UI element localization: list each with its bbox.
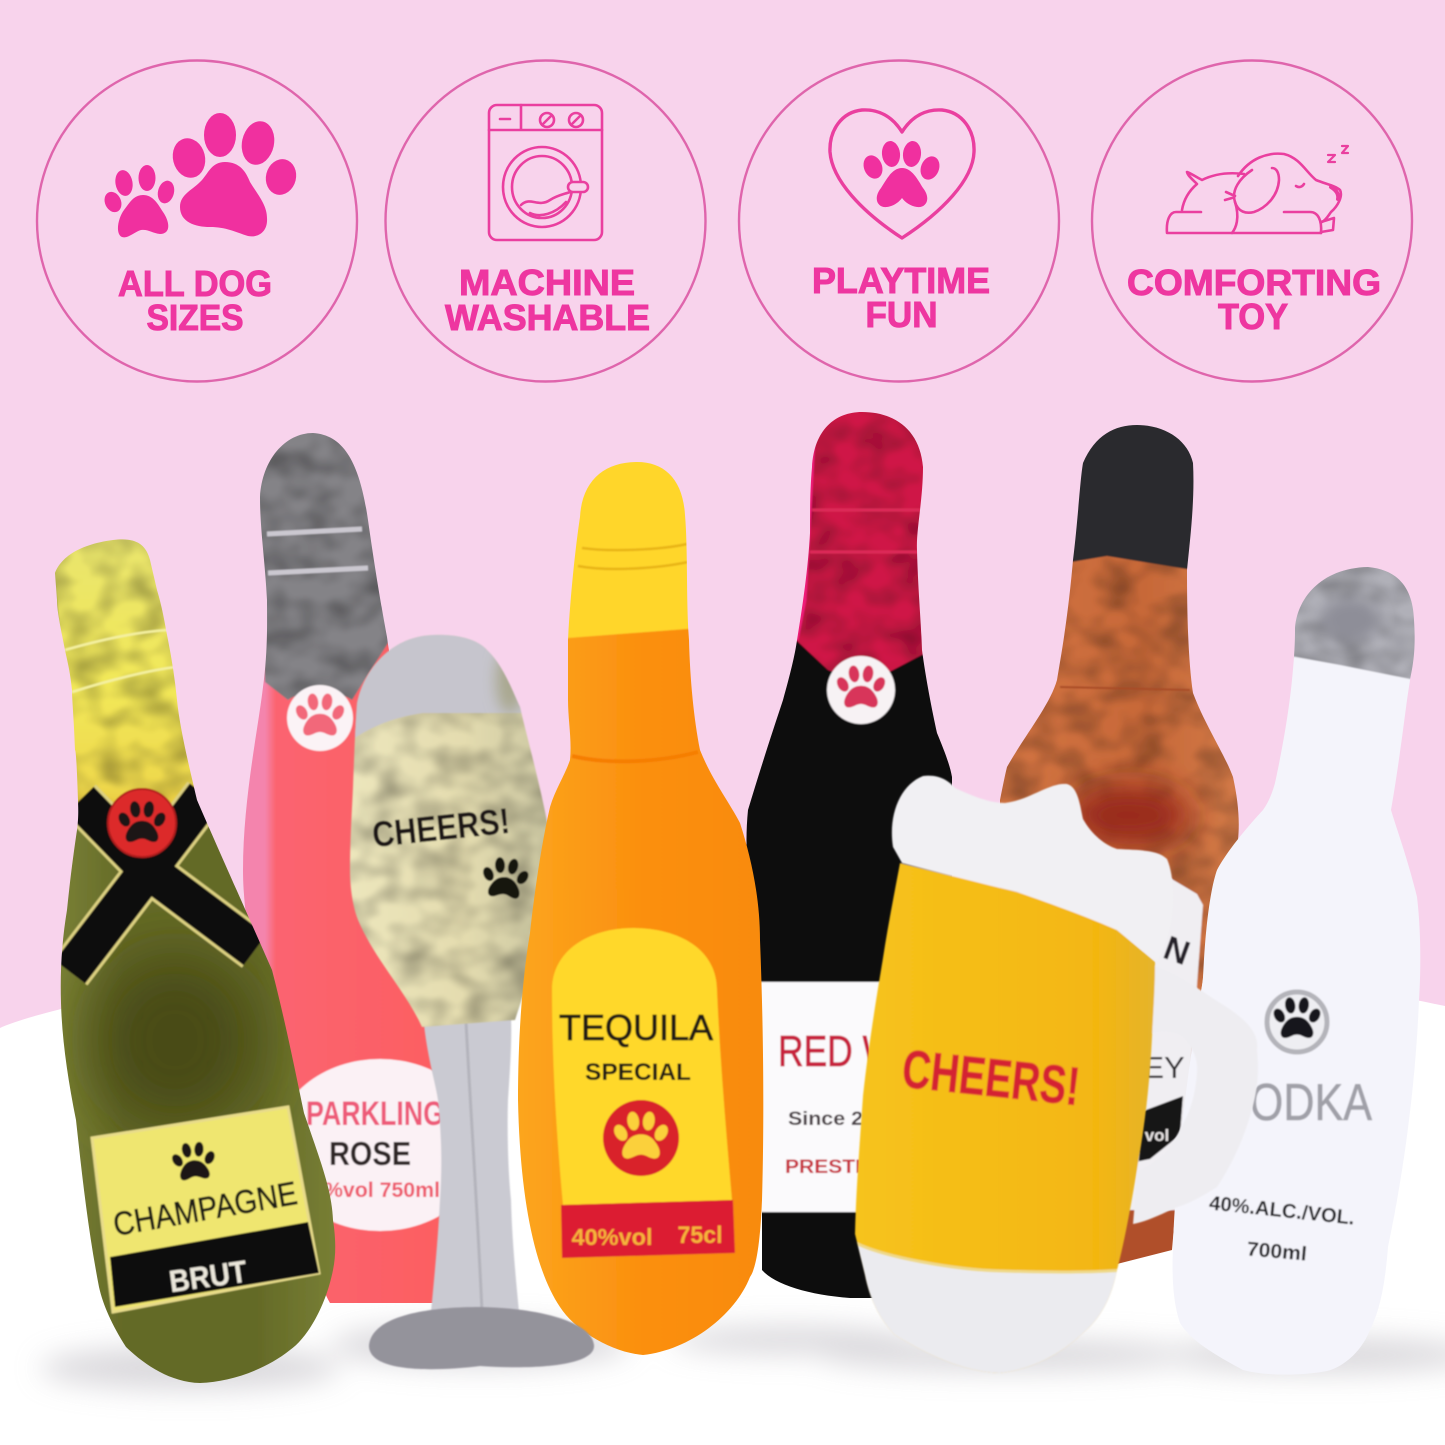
whiskey label xyxy=(1042,878,1204,1212)
icon: washing machine xyxy=(489,105,602,240)
badge: comforting toy xyxy=(1092,60,1412,382)
vodka medallion xyxy=(1267,992,1327,1052)
mug body xyxy=(850,860,1160,1380)
toy: tequila bottle: 40%vol xyxy=(572,1224,652,1250)
red wine label xyxy=(761,980,880,1214)
heading: comforting toy: COMFORTING xyxy=(1127,262,1381,303)
badge: playtime fun xyxy=(739,60,1059,382)
toy: champagne bottle: BRUT xyxy=(167,1254,249,1299)
toy: champagne flute xyxy=(345,630,560,1312)
champagne medallion xyxy=(108,789,176,857)
rose label xyxy=(299,1058,442,1232)
tequila yellow label xyxy=(552,928,732,1205)
mug handle xyxy=(1133,966,1258,1224)
red wine medallion xyxy=(827,656,895,724)
icon: heart with paw xyxy=(830,110,974,238)
toy: sparkling rose bottle: %vol 750ml xyxy=(324,1179,440,1202)
toy: whiskey bottle: vol xyxy=(1145,1126,1169,1145)
tequila red strip xyxy=(561,1200,735,1258)
vodka label text: VODKA xyxy=(1221,1074,1372,1132)
mug text: CHEERS! xyxy=(899,1039,1083,1117)
flute base xyxy=(369,1307,594,1369)
floor shadows xyxy=(40,1323,1445,1390)
tequila label text: TEQUILA xyxy=(559,1007,713,1048)
rose label text: PARKLING xyxy=(306,1095,444,1133)
whiskey label text: N xyxy=(1159,929,1195,973)
rose medallion xyxy=(287,685,353,751)
badge: comforting toy: TOY xyxy=(1218,296,1288,337)
toy: vodka bottle: 40%.ALC./VOL. xyxy=(1208,1192,1356,1230)
toy: whiskey bottle xyxy=(995,415,1245,1270)
toy: red wine bottle xyxy=(740,405,960,1305)
toy: sparkling rose bottle xyxy=(243,433,441,1303)
badge: machine washable xyxy=(386,60,706,382)
toy: tequila bottle: 75cl xyxy=(678,1222,722,1249)
champagne black ribbon xyxy=(70,795,255,972)
toy: tequila bottle xyxy=(515,455,770,1360)
tequila medallion xyxy=(603,1100,679,1176)
badge: all dog sizes xyxy=(37,60,357,382)
toy: vodka bottle: 700ml xyxy=(1246,1238,1308,1266)
red wine label text: RED W xyxy=(778,1027,896,1076)
mug foam xyxy=(892,776,1173,962)
toy: sparkling rose bottle: ROSE xyxy=(329,1135,411,1172)
badge: machine washable: WASHABLE xyxy=(445,297,650,338)
toy: red wine bottle: PRESTI xyxy=(785,1157,861,1178)
champagne label text: CHAMPAGNE xyxy=(110,1174,300,1243)
background: white floor curve xyxy=(0,930,1445,1445)
toy: red wine bottle: Since 2 xyxy=(788,1109,863,1130)
toy: tequila bottle: SPECIAL xyxy=(585,1059,691,1086)
heading: playtime fun: PLAYTIME xyxy=(812,260,990,301)
badge: all dog sizes: SIZES xyxy=(146,297,244,338)
toy: champagne bottle xyxy=(50,530,345,1390)
flute bowl xyxy=(349,634,548,1028)
champagne label xyxy=(92,1107,319,1312)
toy: beer mug xyxy=(850,776,1258,1380)
icon: two paw prints xyxy=(101,113,300,237)
heading: all dog sizes: ALL DOG xyxy=(118,263,272,304)
heading: machine washable: MACHINE xyxy=(459,262,635,303)
flute text: CHEERS! xyxy=(370,800,512,855)
icon: sleeping dog xyxy=(1167,146,1348,233)
flute stem xyxy=(424,1018,519,1312)
toy: whiskey bottle: EY xyxy=(1143,1050,1185,1085)
toy: vodka bottle xyxy=(1165,560,1430,1380)
badge: playtime fun: FUN xyxy=(866,294,938,335)
